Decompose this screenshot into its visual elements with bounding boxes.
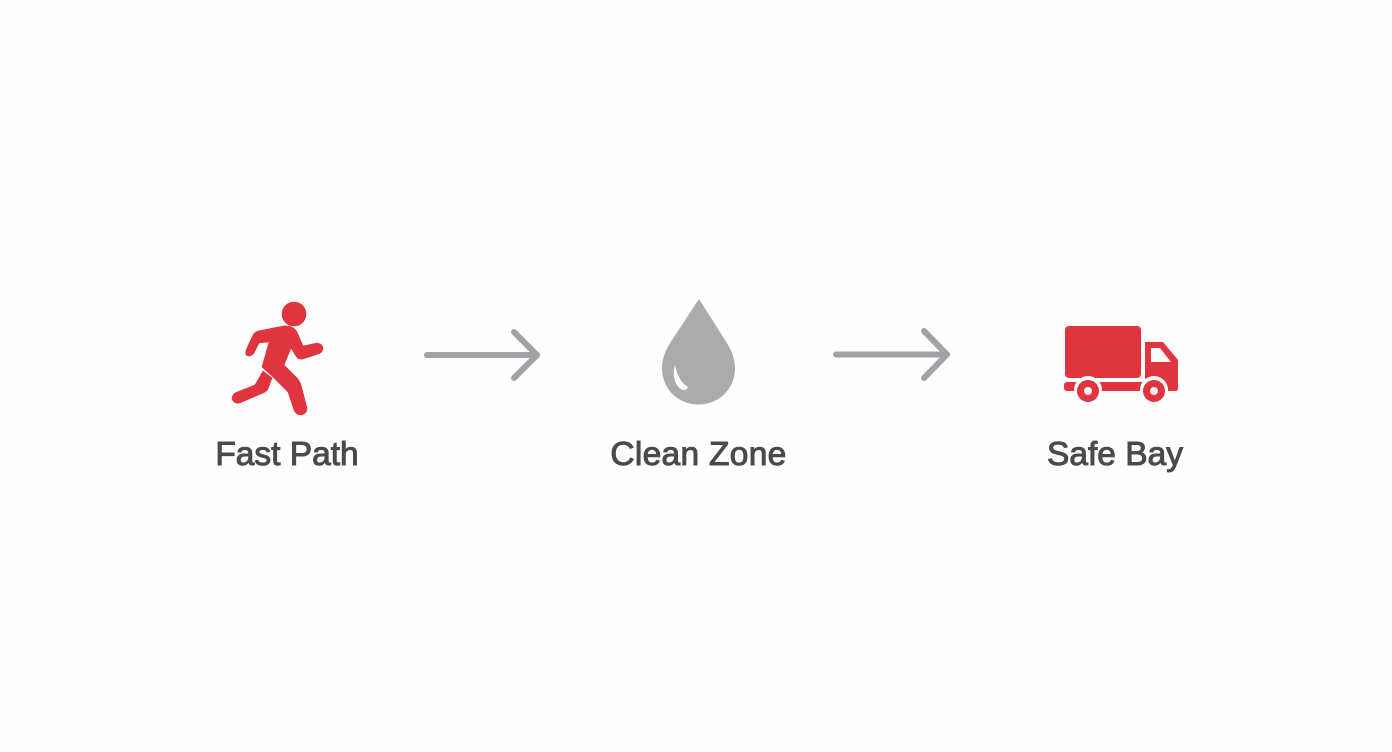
- step: Clean Zone: [610, 299, 787, 473]
- icon: delivery truck: [1064, 326, 1178, 404]
- arrow: Clean Zone to Safe Bay: [836, 331, 947, 378]
- step: Fast Path: [215, 302, 359, 473]
- arrow: Fast Path to Clean Zone: [427, 332, 537, 378]
- icon: water drop: [662, 299, 735, 404]
- label: Safe Bay: Safe Bay: [1047, 436, 1183, 473]
- label: Fast Path: Fast Path: [215, 436, 359, 473]
- step: Safe Bay: [1047, 326, 1183, 473]
- icon: running person: [232, 302, 323, 415]
- label: Clean Zone: Clean Zone: [610, 436, 787, 473]
